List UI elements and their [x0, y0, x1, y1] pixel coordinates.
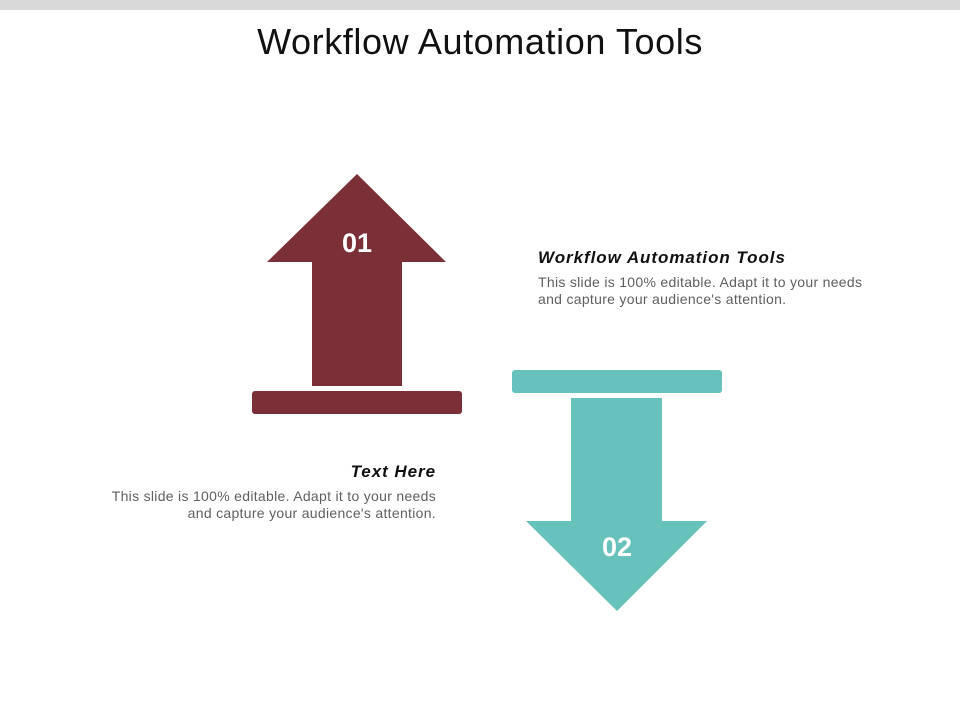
text block 2: and capture your audience's attention. [188, 505, 436, 521]
text block 2: This slide is 100% editable. Adapt it to your needs [112, 488, 436, 504]
text block 2 [112, 462, 436, 521]
text block 1: and capture your audience's attention. [538, 291, 786, 307]
text block 1 [538, 248, 862, 307]
arrow 01 up [252, 174, 462, 414]
top bar [0, 0, 960, 10]
label 01: 01 [342, 228, 372, 258]
text block 1: This slide is 100% editable. Adapt it to your needs [538, 274, 862, 290]
text block 2: Text Here [351, 462, 436, 481]
title: Workflow Automation Tools [257, 21, 703, 62]
text block 1: Workflow Automation Tools [538, 248, 786, 267]
label 02: 02 [602, 532, 632, 562]
arrow 02 down [512, 370, 722, 611]
